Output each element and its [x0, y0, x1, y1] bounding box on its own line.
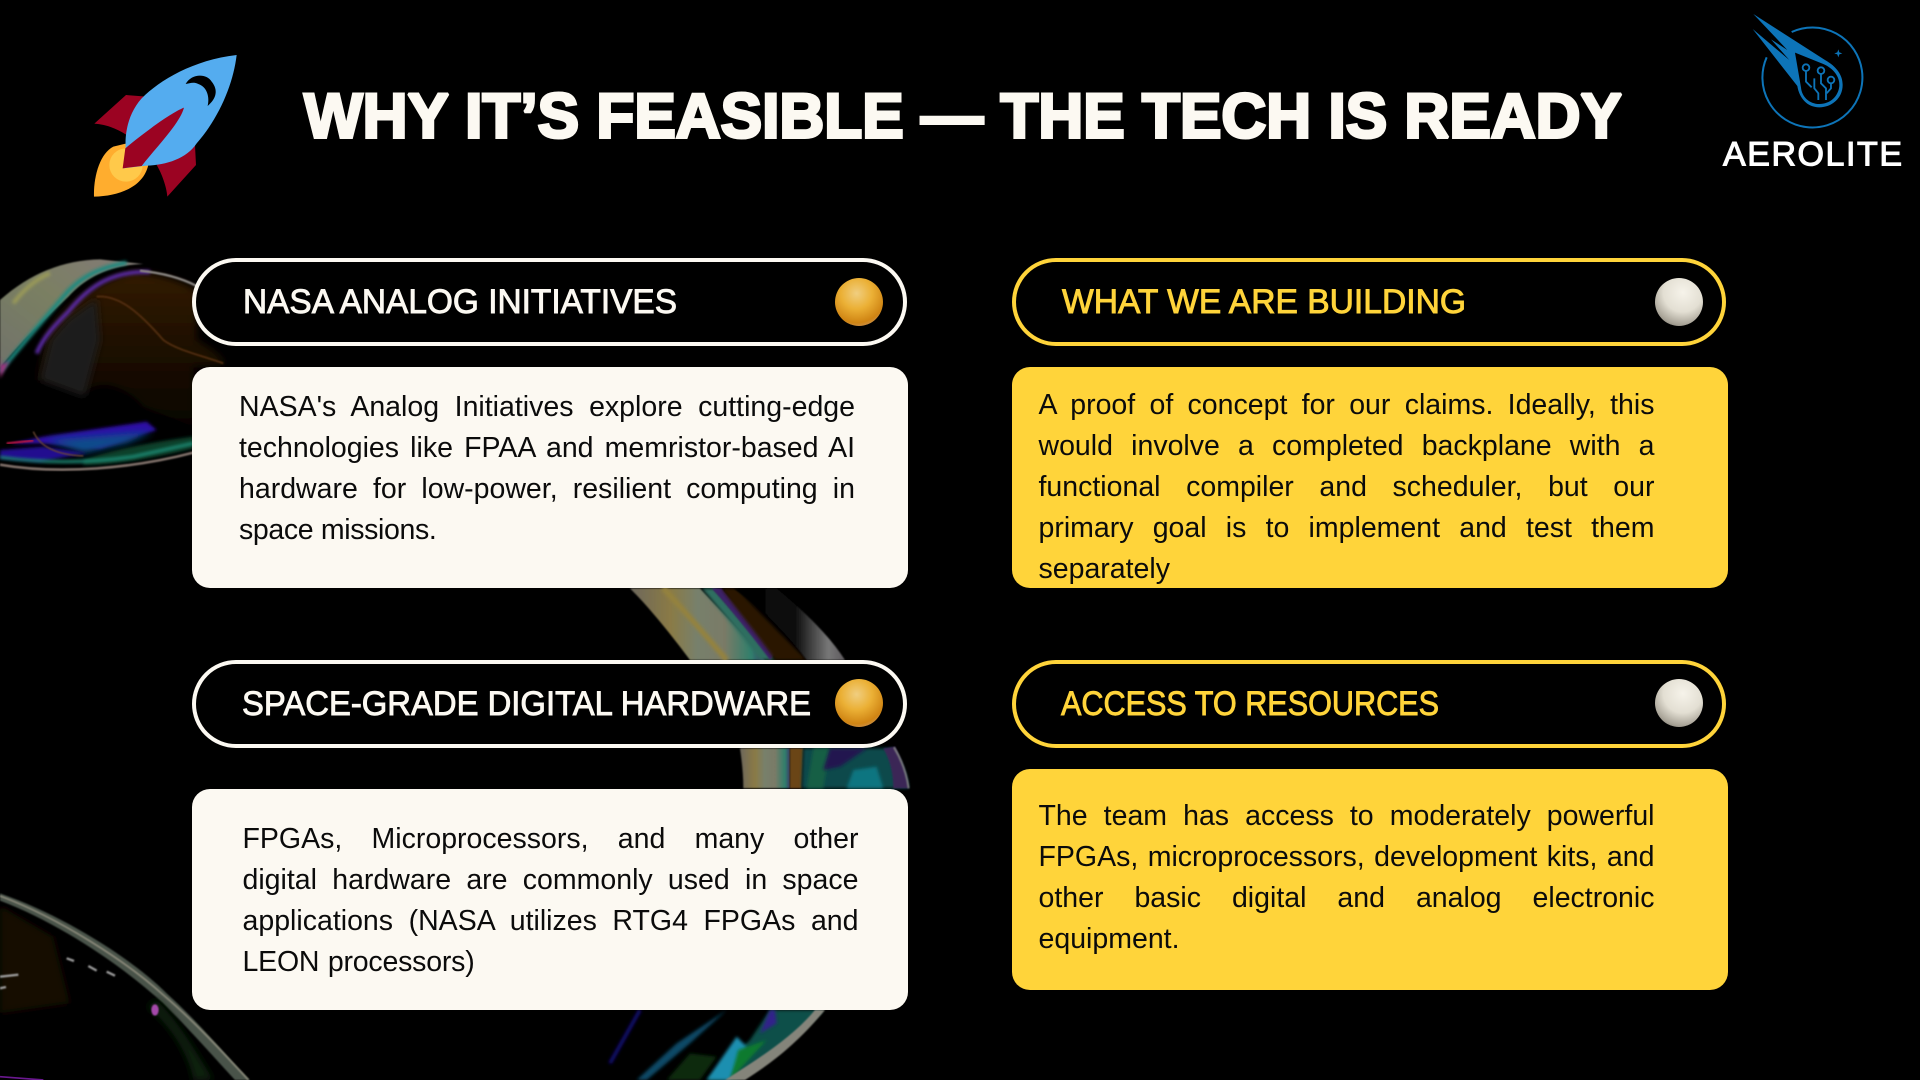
panel: Access to Resources text: equipment. [1038, 923, 1180, 955]
panel: Space-Grade Digital Hardware text: applications (NASA utilizes RTG4 FPGAs and [242, 905, 858, 937]
pill: Space-Grade Digital Hardware [194, 662, 905, 746]
logo wordmark: AEROLITE [1723, 136, 1902, 174]
panel: NASA Analog Initiatives text [192, 367, 908, 588]
bubble: lower left [0, 893, 250, 1080]
panel: What We Are Building text: separately [1038, 553, 1170, 585]
panel: NASA Analog Initiatives text: hardware for low-power, resilient computing in [239, 473, 855, 505]
panel: Access to Resources text: FPGAs, microprocessors, development kits, and [1038, 841, 1654, 873]
title: WHY IT’S FEASIBLE — THE TECH IS READY [304, 82, 1622, 152]
panel: What We Are Building text [1012, 367, 1728, 588]
panel: What We Are Building text: would involve a completed backplane with a [1038, 430, 1654, 462]
pill: What We Are Building: WHAT WE ARE BUILDING [1062, 283, 1466, 321]
panel: Access to Resources text: The team has access to moderately powerful [1038, 800, 1654, 832]
panel: Access to Resources text [1012, 769, 1728, 990]
icon: comet emblem [1753, 14, 1862, 127]
panel: Space-Grade Digital Hardware text: LEON processors) [242, 946, 474, 978]
panel: What We Are Building text: primary goal is to implement and test them [1038, 512, 1654, 544]
panel: Access to Resources text: other basic digital and analog electronic [1038, 882, 1654, 914]
logo: Aerolite [1723, 14, 1902, 174]
panel: What We Are Building text: A proof of concept for our claims. Ideally, this [1038, 389, 1654, 421]
pill: NASA Analog Initiatives [194, 260, 905, 344]
panel: What We Are Building text: functional compiler and scheduler, but our [1038, 471, 1654, 503]
bubble: upper left [0, 259, 224, 470]
pill: Space-Grade Digital Hardware: SPACE-GRADE DIGITAL HARDWARE [242, 685, 811, 723]
icon: rocket [94, 55, 237, 197]
pill: NASA Analog Initiatives: NASA ANALOG INITIATIVES [243, 283, 677, 321]
panel: Space-Grade Digital Hardware text: digital hardware are commonly used in space [242, 864, 858, 896]
panel: Space-Grade Digital Hardware text: FPGAs, Microprocessors, and many other [242, 823, 858, 855]
panel: NASA Analog Initiatives text: space missions. [239, 514, 436, 546]
panel: Space-Grade Digital Hardware text [192, 789, 908, 1010]
pill: What We Are Building [1014, 260, 1724, 344]
pill: Access to Resources: ACCESS TO RESOURCES [1061, 685, 1439, 723]
pill: Access to Resources [1014, 662, 1724, 746]
panel: NASA Analog Initiatives text: NASA's Analog Initiatives explore cutting-edge [239, 391, 855, 423]
bubble: center band [610, 588, 909, 1080]
panel: NASA Analog Initiatives text: technologies like FPAA and memristor-based AI [239, 432, 855, 464]
